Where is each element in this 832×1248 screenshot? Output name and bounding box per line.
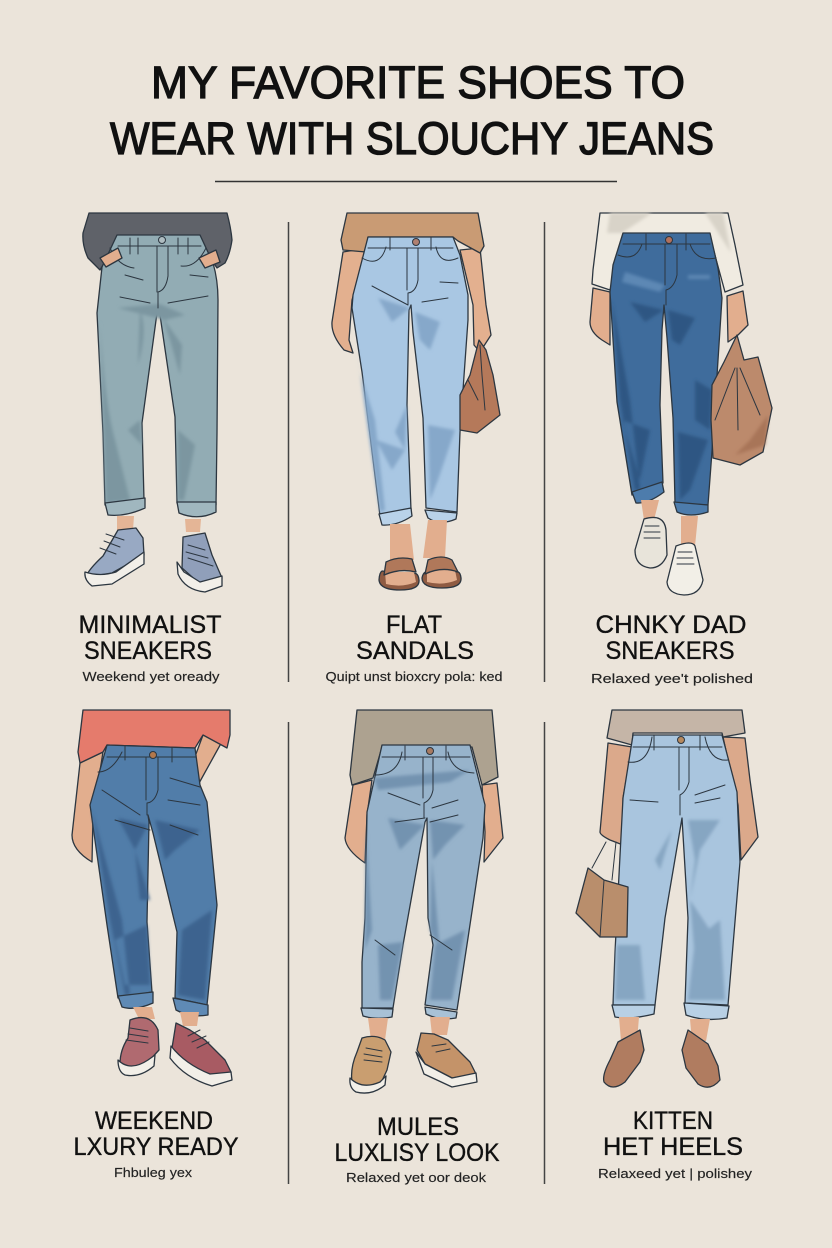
heading <box>356 611 474 665</box>
heading: MULES <box>377 1113 459 1141</box>
heading: LXURY READY <box>74 1133 239 1161</box>
heading: WEEKEND <box>95 1107 213 1135</box>
icon: large tan bag <box>711 335 772 465</box>
icon: hands in pockets <box>100 248 220 268</box>
icon: blue-grey sneaker right <box>177 533 222 592</box>
icon: beige top and arms <box>600 710 758 860</box>
caption: Weekend yet oready <box>82 669 220 684</box>
heading <box>603 1107 743 1161</box>
panel: kitten heels <box>576 710 758 1181</box>
caption: Relaxed yet oor deok <box>346 1170 487 1185</box>
icon: brown sandals <box>379 557 461 590</box>
caption: Relaxed yee't polished <box>591 671 753 686</box>
icon: pale blue jeans <box>612 735 740 1019</box>
icon: grey sweater <box>83 213 232 270</box>
icon: dusty blue jeans <box>361 745 485 1019</box>
icon: light blue jeans <box>352 237 468 525</box>
icon: tan handbag <box>576 842 628 937</box>
heading: HET HEELS <box>603 1133 743 1161</box>
icon: dark blue jeans <box>610 233 722 515</box>
icon: white sneakers <box>635 517 703 595</box>
caption: Relaxeed yet | polishey <box>598 1166 753 1181</box>
heading: KITTEN <box>633 1107 713 1135</box>
icon: maroon sneakers <box>118 1018 232 1086</box>
panel: flat sandals <box>326 213 502 684</box>
title: WEAR WITH SLOUCHY JEANS <box>110 113 714 164</box>
icon: tan mules <box>350 1033 477 1093</box>
icon: cream top and arms <box>590 213 748 345</box>
heading: MINIMALIST <box>78 611 222 639</box>
panel: mules luxury look <box>334 710 503 1185</box>
heading: SNEAKERS <box>606 637 734 665</box>
caption: Fhbuleg yex <box>114 1165 193 1180</box>
title: MY FAVORITE SHOES TO <box>151 57 685 108</box>
heading: SANDALS <box>356 637 474 665</box>
icon: mid blue jeans <box>90 745 217 1016</box>
heading <box>334 1113 500 1167</box>
caption: Quipt unst bioxcry pola: ked <box>326 669 502 684</box>
icon: taupe top and arms <box>345 710 503 863</box>
heading <box>78 611 222 665</box>
icon: tan top and arms <box>332 213 491 353</box>
panel: chunky dad sneakers <box>590 213 772 686</box>
heading: FLAT <box>386 611 442 639</box>
icon: grey slouchy jeans <box>97 235 218 517</box>
icon: brown handbag <box>460 340 500 433</box>
heading: LUXLISY LOOK <box>334 1139 500 1167</box>
heading <box>596 611 746 665</box>
heading: CHNKY DAD <box>596 611 746 639</box>
heading: SNEAKERS <box>84 637 212 665</box>
heading <box>74 1107 239 1161</box>
title <box>110 57 714 164</box>
icon: brown kitten heels <box>604 1030 720 1087</box>
icon: blue-grey sneaker left <box>85 528 144 586</box>
panel: minimalist sneakers <box>78 213 232 684</box>
panel: weekend luxury ready <box>72 710 239 1180</box>
icon: coral top and arms <box>72 710 230 862</box>
